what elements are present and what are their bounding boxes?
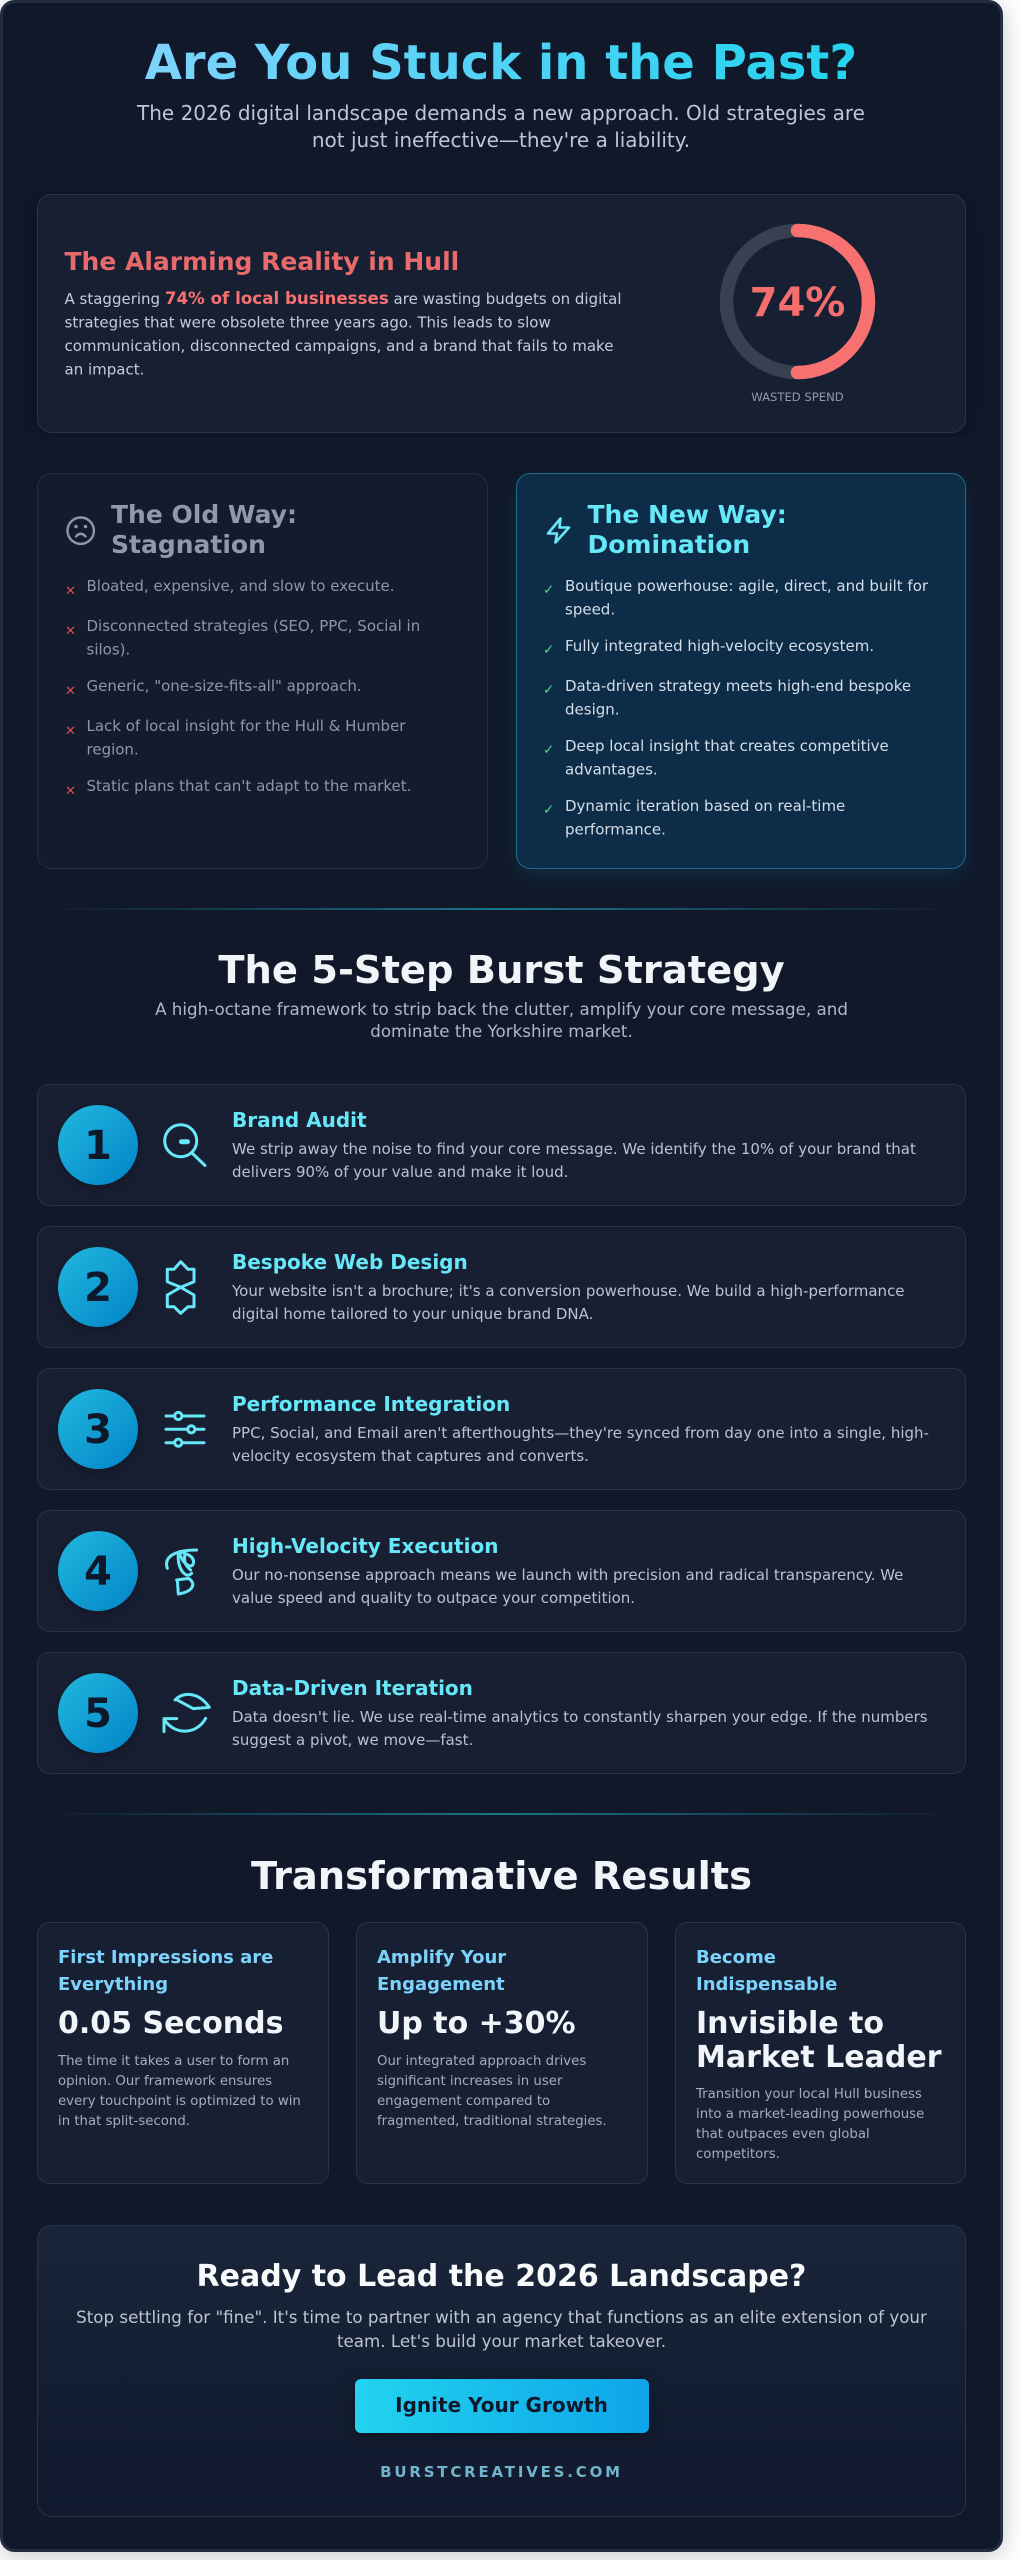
result text: The time it takes a user to form an xyxy=(57,2054,289,2069)
list: old way points: Bloated, expensive, and slow to execute. xyxy=(86,577,394,595)
result value: Market Leader xyxy=(696,2040,942,2075)
result value: Invisible to xyxy=(696,2006,884,2041)
step 1 card xyxy=(38,1084,966,1206)
step 5 card xyxy=(38,1652,966,1774)
cta button xyxy=(355,2379,649,2433)
step 3 text: velocity ecosystem that captures and converts. xyxy=(232,1447,589,1465)
step 1 text xyxy=(232,1140,916,1181)
result card: engagement xyxy=(356,1922,648,2184)
heading: the old way: Stagnation xyxy=(111,530,266,559)
step 2 title: Bespoke Web Design xyxy=(232,1250,468,1274)
step 5 number xyxy=(58,1673,138,1753)
panel: alarming reality xyxy=(38,194,966,432)
list: new way points: Dynamic iteration based on real-time xyxy=(565,797,845,815)
step 1 title: Brand Audit xyxy=(232,1108,367,1132)
result text: engagement compared to xyxy=(377,2094,550,2109)
panel: the new way xyxy=(516,474,966,868)
subtitle: not just ineffective—they're a liability. xyxy=(312,128,690,152)
icon: sad face xyxy=(68,518,94,544)
step 3 text: PPC, Social, and Email aren't afterthoughts—they're synced from day one into a single, high- xyxy=(232,1424,929,1442)
step 1 number xyxy=(58,1105,138,1185)
icon: crossed shape xyxy=(167,1262,194,1313)
list: old way points xyxy=(86,577,420,795)
result heading xyxy=(696,1947,837,1995)
heading: transformative results: Transformative Results xyxy=(251,1854,752,1899)
icon: lightning bolt xyxy=(548,518,569,542)
heading: the old way xyxy=(111,500,297,559)
list: old way points: silos). xyxy=(86,640,130,658)
list: new way points: Boutique powerhouse: agile, direct, and built for xyxy=(565,577,929,595)
step 5 text xyxy=(232,1708,928,1749)
cta button: Ignite Your Growth xyxy=(395,2393,608,2417)
result value: Up to +30% xyxy=(377,2006,576,2041)
website link: BURSTCREATIVES.COM xyxy=(380,2463,623,2481)
result text: Transition your local Hull business xyxy=(695,2087,922,2102)
step 2 number xyxy=(58,1247,138,1327)
cta text: Stop settling for "fine". It's time to partner with an agency that functions as an elite extension of your xyxy=(76,2307,927,2327)
panel: the old way xyxy=(38,474,488,868)
result value: 0.05 Seconds xyxy=(58,2006,284,2041)
list: new way points: advantages. xyxy=(565,760,658,778)
list: new way points: Fully integrated high-velocity ecosystem. xyxy=(565,637,874,655)
step 2 card xyxy=(38,1226,966,1348)
step 4 number xyxy=(58,1531,138,1611)
step 3 text xyxy=(232,1424,929,1465)
step 3 number xyxy=(58,1389,138,1469)
title: Are You Stuck in the Past? xyxy=(145,35,857,91)
step 5 title: Data-Driven Iteration xyxy=(232,1676,473,1700)
icons: green ticks: ✓ xyxy=(543,742,554,758)
list: new way points: performance. xyxy=(565,820,666,838)
icon: sliders xyxy=(166,1412,204,1446)
chart: 74% ring: 74% xyxy=(750,280,845,326)
step 2 text: digital home tailored to your unique brand DNA. xyxy=(232,1305,593,1323)
list: old way points: region. xyxy=(86,740,139,758)
icons: red crosses: ✕ xyxy=(65,624,76,639)
icons: red crosses xyxy=(65,584,76,799)
result heading: Engagement xyxy=(377,1974,505,1995)
step 3 card xyxy=(38,1368,966,1490)
result heading xyxy=(58,1947,273,1995)
icons: green ticks: ✓ xyxy=(543,642,554,658)
result heading: Everything xyxy=(58,1974,168,1995)
step 5 text: Data doesn't lie. We use real-time analytics to constantly sharpen your edge. If the numbers xyxy=(232,1708,928,1726)
result heading: Amplify Your xyxy=(377,1947,506,1968)
subtitle: The 2026 digital landscape demands a new approach. Old strategies are xyxy=(136,101,865,125)
result text: in that split-second. xyxy=(58,2114,190,2129)
step 4 text: value speed and quality to outpace your competition. xyxy=(232,1589,635,1607)
heading: the new way: Domination xyxy=(588,530,750,559)
heading: 5-step strategy: The 5-Step Burst Strategy xyxy=(218,948,785,993)
list: new way points: Data-driven strategy meets high-end bespoke xyxy=(565,677,911,695)
cta heading: Ready to Lead the 2026 Landscape? xyxy=(197,2259,806,2294)
heading: the old way: The Old Way: xyxy=(111,500,297,529)
icons: red crosses: ✕ xyxy=(65,584,76,599)
list: old way points: Generic, "one-size-fits-all" approach. xyxy=(86,677,362,695)
list: new way points xyxy=(565,577,929,838)
result text: that outpaces even global xyxy=(696,2127,870,2142)
result text xyxy=(57,2054,301,2129)
chart: 74% ring: WASTED SPEND xyxy=(751,390,844,404)
list: old way points: Static plans that can't adapt to the market. xyxy=(86,777,411,795)
result text: every touchpoint is optimized to win xyxy=(58,2094,301,2109)
step 1 number: 1 xyxy=(84,1123,112,1169)
step 2 text: Your website isn't a brochure; it's a conversion powerhouse. We build a high-performance xyxy=(231,1282,905,1300)
step 4 title: High-Velocity Execution xyxy=(232,1534,498,1558)
step 1 text: We strip away the noise to find your core message. We identify the 10% of your brand that xyxy=(232,1140,916,1158)
result text: significant increases in user xyxy=(377,2074,563,2089)
cta text xyxy=(76,2307,927,2351)
text block: strategy intro: A high-octane framework to strip back the clutter, amplify your core message, and xyxy=(155,999,848,1019)
result text: opinion. Our framework ensures xyxy=(58,2074,272,2089)
icons: green ticks: ✓ xyxy=(543,582,554,598)
text block: strategy intro: dominate the Yorkshire market. xyxy=(370,1021,633,1041)
step 4 card xyxy=(38,1510,966,1632)
text block: alarming reality: communication, disconnected campaigns, and a brand that fails to make xyxy=(64,337,613,355)
result card: first impressions xyxy=(38,1922,328,2184)
icons: green ticks: ✓ xyxy=(543,682,554,698)
step 3 title: Performance Integration xyxy=(232,1392,510,1416)
text block: alarming reality: strategies that were obsolete three years ago. This leads to slow xyxy=(64,314,551,332)
panel: call to action xyxy=(38,2226,966,2516)
heading: the new way xyxy=(588,500,787,559)
list: old way points: Disconnected strategies (SEO, PPC, Social in xyxy=(86,617,420,635)
text block: strategy intro xyxy=(155,999,848,1041)
icons: red crosses: ✕ xyxy=(65,724,76,739)
icons: green ticks: ✓ xyxy=(543,802,554,818)
icon: refresh xyxy=(164,1694,209,1732)
result heading xyxy=(377,1947,506,1995)
text block: alarming reality xyxy=(64,288,622,378)
step 4 number: 4 xyxy=(84,1549,112,1595)
result text: fragmented, traditional strategies. xyxy=(377,2114,607,2129)
list: old way points: Lack of local insight for the Hull & Humber xyxy=(86,717,406,735)
icons: red crosses: ✕ xyxy=(65,684,76,699)
result heading: Indispensable xyxy=(696,1974,837,1995)
step 2 number: 2 xyxy=(84,1265,112,1311)
result text xyxy=(695,2087,924,2162)
heading: alarming reality: The Alarming Reality in Hull xyxy=(64,247,459,276)
icons: green ticks xyxy=(543,582,554,818)
list: new way points: Deep local insight that creates competitive xyxy=(565,737,889,755)
result text: into a market-leading powerhouse xyxy=(696,2107,924,2122)
result text: competitors. xyxy=(696,2147,780,2162)
step 1 text: delivers 90% of your value and make it loud. xyxy=(232,1163,568,1181)
step 4 text xyxy=(232,1566,903,1607)
step 5 number: 5 xyxy=(84,1691,112,1737)
icon: magnifier xyxy=(165,1125,205,1166)
result card: indispensable xyxy=(676,1922,966,2184)
step 4 text: Our no-nonsense approach means we launch with precision and radical transparency. We xyxy=(232,1566,903,1584)
list: new way points: design. xyxy=(565,700,620,718)
chart: 74% ring xyxy=(726,230,868,404)
subtitle xyxy=(136,101,865,152)
result text: Our integrated approach drives xyxy=(377,2054,586,2069)
step 5 text: suggest a pivot, we move—fast. xyxy=(232,1731,473,1749)
icon: execution glyph xyxy=(167,1550,197,1594)
list: new way points: speed. xyxy=(565,600,615,618)
result heading: Become xyxy=(696,1947,776,1968)
result value xyxy=(696,2006,942,2075)
text block: alarming reality: an impact. xyxy=(64,360,144,378)
cta text: team. Let's build your market takeover. xyxy=(337,2331,666,2351)
icons: red crosses: ✕ xyxy=(65,784,76,799)
text block: alarming reality: A staggering 74% of local businesses are wasting budgets on digital xyxy=(64,288,622,308)
result text xyxy=(377,2054,607,2129)
step 2 text xyxy=(231,1282,905,1323)
step 3 number: 3 xyxy=(84,1407,112,1453)
heading: the new way: The New Way: xyxy=(588,500,787,529)
result heading: First Impressions are xyxy=(58,1947,273,1968)
